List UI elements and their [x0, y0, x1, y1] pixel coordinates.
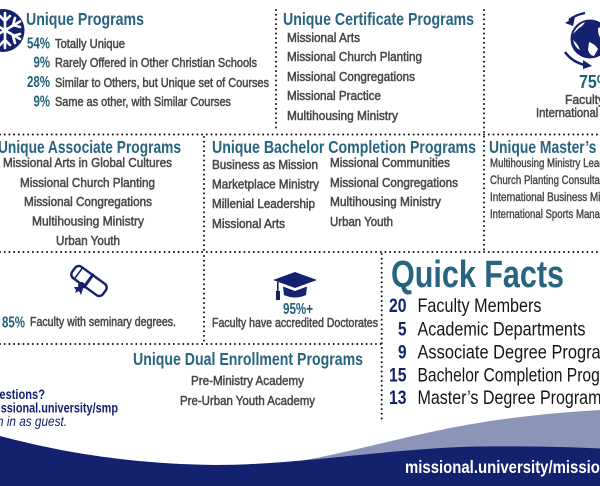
stat: totally unique: Totally Unique — [55, 37, 125, 51]
heading: unique programs: Unique Programs — [26, 9, 144, 29]
stat: similar to others — [27, 74, 269, 91]
list: associate programs: Missional Congregations — [24, 195, 152, 209]
list: associate programs: Multihousing Ministry — [32, 214, 145, 228]
list: dual enrollment programs — [180, 374, 316, 408]
list: associate programs: Urban Youth — [56, 234, 120, 248]
panel: quick facts — [389, 254, 600, 409]
panel: unique bachelor completion programs — [212, 137, 476, 231]
list: dual enrollment programs: Pre-Urban Youth Academy — [180, 394, 316, 408]
list: master's programs — [490, 158, 600, 221]
list: bachelor programs left column: Marketplace Ministry — [212, 178, 320, 192]
list: associate programs: Missional Arts in Global Cultures — [3, 156, 172, 170]
footer wave: light — [300, 410, 600, 470]
stat: rarely offered — [34, 54, 257, 72]
stat: totally unique: 54% — [27, 36, 50, 52]
heading: associate programs: Unique Associate Programs — [0, 137, 181, 157]
panel: unique certificate programs — [283, 9, 474, 123]
callout: questions — [0, 387, 118, 429]
list: bachelor programs right column — [330, 156, 458, 229]
list: certificate programs: Multihousing Ministry — [287, 109, 399, 123]
stat: similar to others: 28% — [27, 74, 50, 91]
icon: snowflake — [0, 9, 24, 52]
list: bachelor programs left column: Business as Mission — [212, 158, 318, 172]
stat: same as other — [34, 94, 231, 110]
list: bachelor programs left column: Millenial Leadership — [212, 197, 315, 211]
text: faculty with international experience — [536, 93, 600, 120]
list: bachelor programs right column: Missional Congregations — [330, 176, 458, 190]
list: certificate programs: Missional Congregations — [287, 70, 415, 84]
list: bachelor programs left column: Missional Arts — [212, 217, 285, 231]
heading: quick facts: Quick Facts — [391, 254, 564, 296]
list: certificate programs: Missional Arts — [287, 31, 360, 45]
fact: academic departments: 5 — [398, 320, 407, 340]
icon: diploma scroll — [69, 263, 109, 299]
stat: same as other: 9% — [34, 94, 50, 110]
list: bachelor programs right column: Multihousing Ministry — [330, 195, 442, 209]
icon: globe with arrows — [565, 13, 600, 69]
panel: unique programs — [0, 9, 269, 110]
list: certificate programs: Missional Practice — [287, 89, 381, 103]
fact: faculty members — [389, 295, 542, 317]
heading: dual enrollment programs: Unique Dual Enrollment Programs — [133, 349, 363, 369]
stat: same as other: Same as other, with Similar Courses — [55, 95, 231, 109]
list: certificate programs: Missional Church Planting — [287, 50, 422, 64]
icon: graduation cap — [273, 272, 317, 300]
list: bachelor programs left column — [212, 158, 320, 231]
list: bachelor programs right column: Urban Youth — [330, 215, 393, 229]
text: faculty with seminary degrees: Faculty with seminary degrees. — [30, 315, 176, 329]
heading: bachelor completion programs: Unique Bachelor Completion Programs — [212, 137, 476, 157]
text: faculty have accredited doctorates: Faculty have accredited Doctorates — [212, 316, 378, 330]
panel: unique associate programs — [0, 137, 181, 248]
list: associate programs — [3, 156, 172, 248]
panel: unique master's programs — [489, 137, 600, 221]
panel: seminary degrees — [2, 263, 176, 332]
list: dual enrollment programs: Pre-Ministry Academy — [191, 374, 305, 388]
stat: totally unique — [27, 36, 125, 52]
fact: faculty members: 20 — [389, 296, 406, 317]
list: certificate programs — [287, 31, 422, 123]
footer wave: navy — [0, 436, 600, 486]
fact: associate degree programs: 9 — [398, 342, 406, 364]
stat: 95%+: 95%+ — [283, 301, 313, 318]
list: bachelor programs right column: Missional Communities — [330, 156, 450, 170]
panel: accredited doctorates — [212, 272, 378, 330]
list: associate programs: Missional Church Planting — [20, 176, 155, 190]
stat: rarely offered: 9% — [34, 54, 50, 72]
panel: international faculty — [536, 13, 600, 120]
fact: master's degree programs: 13 — [389, 388, 406, 409]
fact: bachelor completion programs: 15 — [389, 366, 407, 386]
stat: 85%: 85% — [2, 314, 25, 332]
stat: rarely offered: Rarely Offered in Other Christian Schools — [55, 56, 257, 70]
fact: faculty members: Faculty Members — [418, 295, 542, 317]
stat: similar to others: Similar to Others, but Unique set of Courses — [55, 76, 269, 90]
heading: certificate programs: Unique Certificate Programs — [283, 9, 474, 29]
panel: unique dual enrollment programs — [133, 349, 363, 408]
